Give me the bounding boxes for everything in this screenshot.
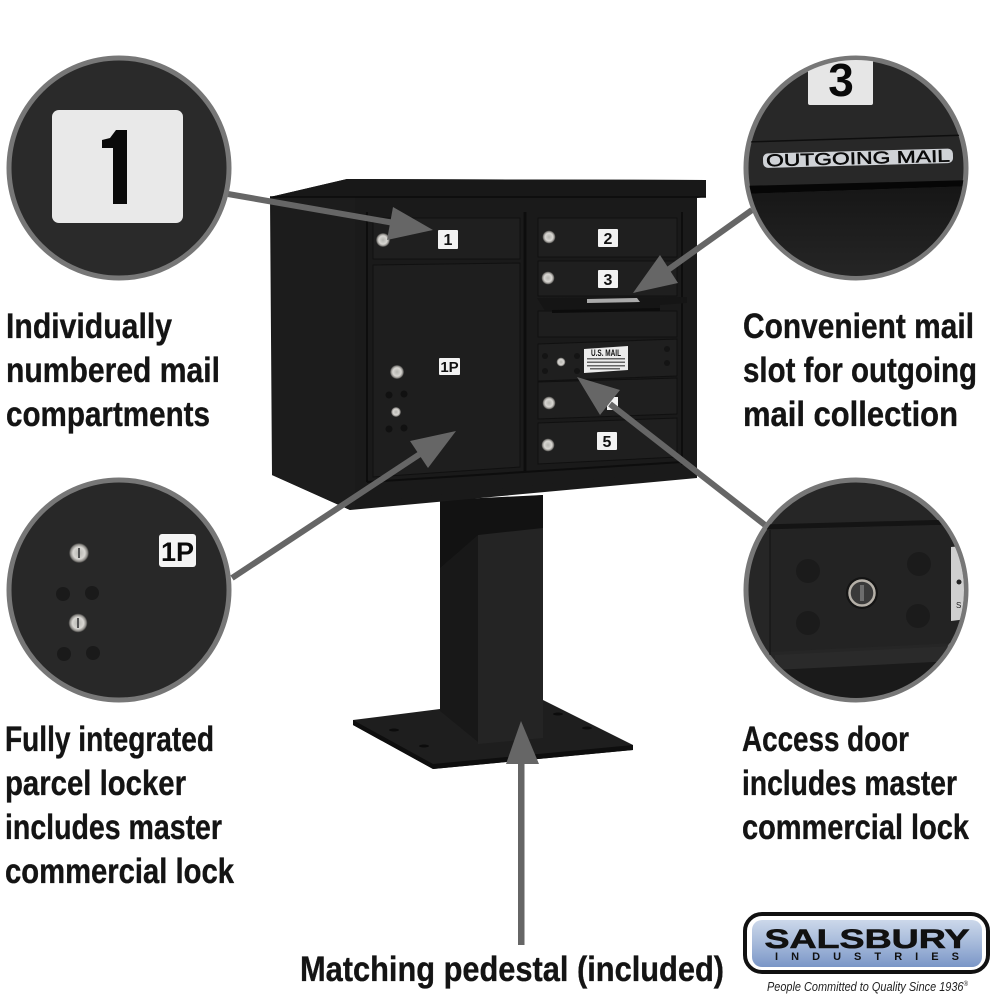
pedestal xyxy=(353,495,633,769)
arrow to compartment 1 xyxy=(228,194,433,240)
arrow to access door xyxy=(577,377,765,525)
number plate 1: 1 xyxy=(100,112,140,226)
compartment doors xyxy=(373,218,687,477)
locks xyxy=(376,230,670,452)
callout circle: outgoing mail slot xyxy=(740,50,975,280)
number labels xyxy=(438,229,640,451)
logo: Salsbury Industries: SALSBURY xyxy=(764,924,970,954)
text: numbered compartments: compartments xyxy=(6,395,210,434)
logo tagline: People Committed to Quality Since 1936 xyxy=(767,980,992,994)
number plate 3: 3 xyxy=(828,54,854,106)
number labels: U.S. MAIL xyxy=(591,348,621,358)
outgoing mail plate xyxy=(763,148,953,168)
text: outgoing slot: mail collection xyxy=(743,395,958,434)
text: numbered compartments: Individually xyxy=(6,307,172,346)
outgoing mail plate: OUTGOING MAIL xyxy=(766,147,950,170)
number plate 3 xyxy=(808,60,873,105)
text: parcel locker: includes master xyxy=(5,808,222,847)
rivets xyxy=(796,552,931,635)
callout circle: parcel locker lock xyxy=(9,480,229,700)
arrow to parcel locker xyxy=(232,431,456,578)
number labels: 5 xyxy=(603,434,612,451)
number plate 1P: 1P xyxy=(161,537,194,567)
number labels: 3 xyxy=(604,272,613,289)
number plate 1 xyxy=(52,110,183,226)
callout circle: numbered compartment xyxy=(9,58,229,278)
logo tagline: ® xyxy=(963,980,969,988)
text: access door: Access door xyxy=(742,720,909,759)
arrow to pedestal xyxy=(506,721,539,945)
text: numbered compartments: numbered mail xyxy=(6,351,220,390)
text: parcel locker: commercial lock xyxy=(5,852,234,891)
number labels: 1 xyxy=(444,232,453,249)
pointer arrows xyxy=(228,194,765,945)
callout circle: access door lock xyxy=(740,480,975,710)
locks and rivets xyxy=(56,543,100,661)
lock xyxy=(846,577,878,609)
arrow to outgoing slot xyxy=(633,210,752,293)
mailbox cabinet xyxy=(270,179,706,510)
text: parcel locker: parcel locker xyxy=(5,764,186,803)
text: pedestal: Matching pedestal (included) xyxy=(300,950,724,989)
plate edge: S xyxy=(956,601,961,610)
number labels: 2 xyxy=(604,231,613,248)
logo: Salsbury Industries xyxy=(745,914,988,972)
plate edge xyxy=(951,546,964,621)
logo: Salsbury Industries: INDUSTRIES xyxy=(775,951,959,963)
number labels: 1P xyxy=(440,359,459,376)
text: parcel locker: Fully integrated xyxy=(5,720,214,759)
